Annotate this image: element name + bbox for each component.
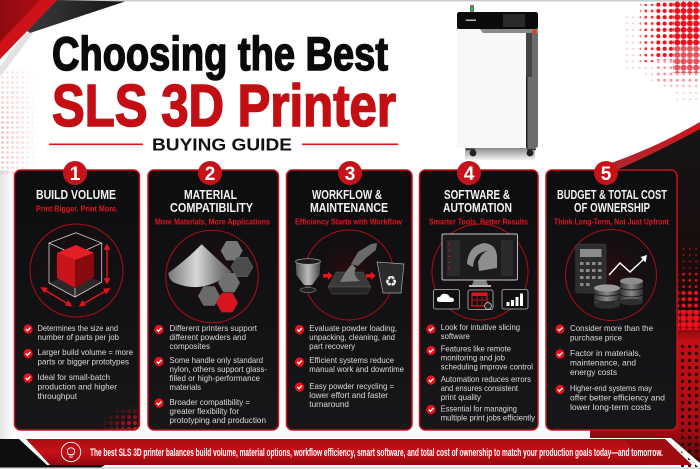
bullets 5 <box>555 324 665 412</box>
heading 3: MAINTENANCE <box>310 201 388 215</box>
title <box>52 27 396 139</box>
tile: cloud upload <box>434 290 460 309</box>
bullets 5: Higher-end systems may <box>570 384 653 393</box>
bullets 5: Factor in materials, <box>570 349 641 358</box>
bullets 2: Broader compatibility = <box>170 398 250 407</box>
top-left corner decoration <box>0 0 125 77</box>
bullets 1: number of parts per job <box>38 333 119 342</box>
bullets 1: production and higher <box>38 382 117 392</box>
badge 4: 4 <box>464 164 475 185</box>
heading 1: BUILD VOLUME <box>36 188 116 202</box>
badge 3: 3 <box>345 164 355 185</box>
badge 5: 5 <box>601 164 612 185</box>
bullets 1: Determines the size and <box>38 324 118 333</box>
heading 3: WORKFLOW & <box>312 188 382 202</box>
subtitle: buying guide: BUYING GUIDE <box>152 134 292 154</box>
bullets 4: print quality <box>441 393 482 402</box>
bullets 3: Easy powder recycling = <box>309 382 394 391</box>
right side swoosh and halftone <box>590 122 700 469</box>
bullets 4: and ensures consistent <box>441 384 519 393</box>
bullets 5: lower long-term costs <box>570 403 651 412</box>
bullets 4: software <box>441 332 470 341</box>
bullets 5: purchase price <box>570 334 622 342</box>
bullets 2: nylon, others support glass- <box>170 365 267 374</box>
title: SLS 3D Printer <box>52 73 396 139</box>
calculator <box>576 244 606 293</box>
trend arrow <box>609 255 647 275</box>
badge 5 <box>594 161 618 185</box>
title: Choosing the Best <box>52 27 388 80</box>
tile: calendar <box>468 290 493 310</box>
bullets 2: different powders and <box>170 333 246 342</box>
tray and glove <box>328 243 377 294</box>
badge 1 <box>63 161 87 185</box>
bullets 1: parts or bigger prototypes <box>38 358 129 366</box>
bullets 4 <box>426 323 536 422</box>
icon: monitor and software tiles <box>432 224 528 320</box>
monitor <box>442 234 518 287</box>
bullets 3: lower effort and faster <box>309 391 388 400</box>
arrow <box>366 272 376 280</box>
tagline 3: Efficiency Starts with Workflow <box>295 216 402 226</box>
heading 4: AUTOMATION <box>443 201 512 215</box>
bullets 4: multiple print jobs efficiently <box>441 414 536 422</box>
bullets 4: scheduling improve control <box>441 362 533 372</box>
hopper <box>296 259 320 293</box>
bullets 2: greater flexibility for <box>170 407 239 416</box>
bullets 2: filled or high-performance <box>170 374 260 383</box>
bullets 5: energy costs <box>570 368 617 377</box>
icon: powder cone and hexagons <box>166 230 258 323</box>
bottom banner <box>0 439 700 469</box>
icon: powder workflow <box>296 230 404 320</box>
bullets 3: manual work and downtime <box>309 365 404 374</box>
bullets 4: Automation reduces errors <box>441 375 531 384</box>
bullets 4: Features like remote <box>441 344 511 354</box>
heading 5: BUDGET & TOTAL COST <box>557 188 667 202</box>
bullets 2: prototyping and production <box>170 416 266 425</box>
bullets 4: monitoring and job <box>441 354 505 362</box>
tagline 2: More Materials, More Applications <box>155 216 270 226</box>
bullets 1 <box>23 324 133 401</box>
heading 2: MATERIAL <box>184 188 237 202</box>
bullets 1: Ideal for small-batch <box>38 373 110 382</box>
bullets 2: Different printers support <box>170 324 258 333</box>
heading 2: COMPATIBILITY <box>170 201 254 215</box>
arrow <box>323 272 332 280</box>
printer illustration <box>457 5 538 160</box>
tagline 1: Print Bigger. Print More. <box>36 204 118 214</box>
bullets 3 <box>295 324 404 409</box>
heading 4: SOFTWARE & <box>444 188 510 202</box>
tagline 5: Think Long-Term, Not Just Upfront <box>554 216 669 226</box>
bullets 4: Look for intuitive slicing <box>441 323 520 332</box>
bullets 1: Larger build volume = more <box>38 348 133 357</box>
tagline 4: Smarter Tools, Better Results <box>429 216 528 226</box>
bullets 5: offer better efficiency and <box>570 394 665 402</box>
badge 3 <box>338 161 362 185</box>
bullets 3: turnaround <box>309 400 349 409</box>
heading 4 <box>443 188 512 215</box>
bullets 1: throughput <box>38 392 78 401</box>
bullets 3: unpacking, cleaning, and <box>309 333 395 342</box>
bullets 5: maintenance, and <box>570 358 636 368</box>
panel 3: workflow and maintenance <box>286 161 412 430</box>
panel 1: build volume <box>14 161 140 430</box>
bullets 3: part recovery <box>309 342 356 351</box>
panel 4: software and automation <box>420 161 538 430</box>
heading 2 <box>170 188 254 215</box>
heading 5 <box>557 188 667 215</box>
bullets 2: materials <box>170 383 201 392</box>
heading 3 <box>310 188 388 215</box>
panel 5: budget and total cost of ownership <box>546 161 677 430</box>
recycling bin: ♻ <box>385 274 397 290</box>
panel 2: material compatibility <box>148 161 278 430</box>
badge 1: 1 <box>70 164 81 185</box>
bullets 2 <box>154 324 267 425</box>
top-right halftone <box>623 1 700 105</box>
icon: calculator, coins and trend arrow <box>566 230 656 320</box>
badge 2: 2 <box>205 164 215 185</box>
bullets 3: Evaluate powder loading, <box>309 324 397 333</box>
coin stacks <box>594 278 643 309</box>
badge 2 <box>198 161 222 185</box>
bullets 2: Some handle only standard <box>170 356 263 365</box>
heading 5: OF OWNERSHIP <box>574 201 650 215</box>
bullets 3: Efficient systems reduce <box>309 356 394 365</box>
icon: build volume cube <box>30 224 123 317</box>
tile: signal bars <box>502 290 528 309</box>
icon: light bulb <box>61 442 81 462</box>
bullets 5: Consider more than the <box>570 324 653 333</box>
bullets 4: Essential for managing <box>441 404 517 414</box>
badge 4 <box>457 161 481 185</box>
bullets 2: composites <box>170 342 210 351</box>
